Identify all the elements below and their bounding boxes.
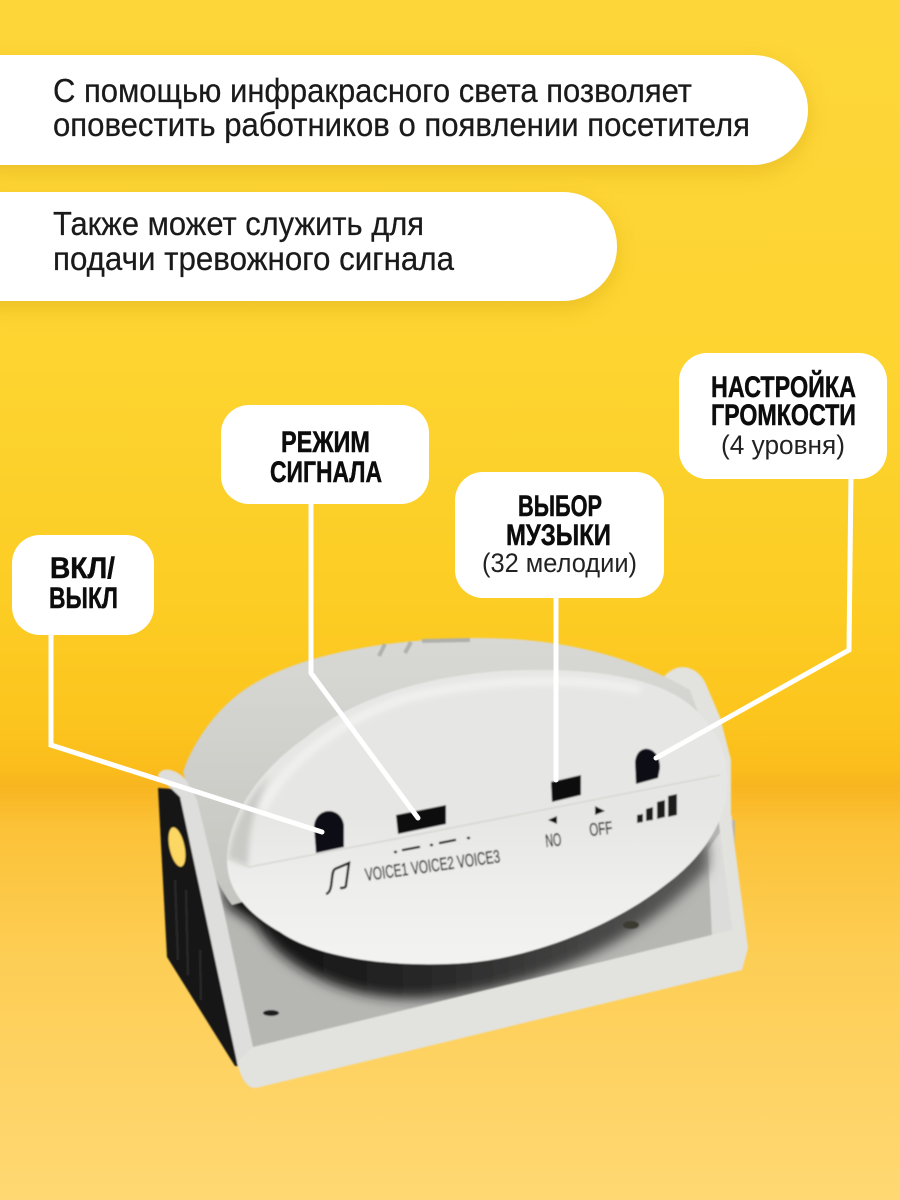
right arrow and OFF label: OFF	[588, 818, 613, 840]
music note icon	[326, 863, 349, 894]
bracket ribs	[175, 880, 201, 1000]
callout: music selection	[455, 472, 664, 598]
left arrow and NO label	[544, 816, 562, 851]
music switch	[551, 775, 581, 802]
black side bracket	[158, 788, 240, 1066]
oval front face	[227, 670, 727, 964]
base front lip	[237, 930, 748, 1088]
mode switch	[396, 805, 446, 834]
right post	[663, 667, 748, 948]
connector line: signal mode	[311, 500, 418, 818]
base floor	[200, 820, 735, 1047]
voice labels: VOICE1 VOICE2 VOICE3	[364, 846, 501, 885]
callout: volume: (4 уровня)	[721, 430, 845, 460]
mounting hole	[166, 826, 188, 868]
vent marks on dome	[379, 640, 470, 656]
right inner wall	[708, 815, 734, 937]
callout: volume: НАСТРОЙКА	[711, 370, 856, 404]
device illustration	[158, 638, 748, 1088]
pill: infrared notification text	[0, 55, 808, 172]
right arrow and OFF label	[588, 806, 613, 840]
callout: music selection: МУЗЫКИ	[506, 519, 611, 552]
pill: alarm signal text: подачи тревожного сигнала	[53, 240, 455, 277]
rear dome shell	[183, 638, 715, 905]
callout: music selection: (32 мелодии)	[482, 548, 637, 578]
power knob slot	[314, 811, 344, 853]
volume level bars	[637, 794, 677, 823]
connector line: volume	[656, 475, 851, 758]
callout: power: ВЫКЛ	[49, 582, 118, 615]
screws	[263, 1010, 279, 1016]
left white arm	[158, 770, 253, 1088]
floor shadow under oval	[226, 840, 708, 998]
pill: alarm signal text	[0, 192, 617, 308]
pill: infrared notification text: оповестить работников о появлении посетителя	[53, 106, 750, 143]
pill: alarm signal text: Также может служить для	[53, 205, 424, 242]
connector line: power	[51, 630, 322, 832]
left arrow and NO label: NO	[544, 829, 562, 851]
callout: signal mode: РЕЖИМ	[281, 426, 370, 459]
volume knob slot	[635, 749, 660, 784]
callout: signal mode	[221, 405, 429, 504]
callout: power	[12, 535, 154, 635]
pill: infrared notification text: С помощью инфракрасного света позволяет	[53, 72, 692, 109]
connector line: music	[554, 595, 558, 780]
callout: signal mode: СИГНАЛА	[270, 456, 382, 489]
left bevel shading	[228, 775, 270, 866]
oval top highlight	[262, 681, 640, 810]
callout: volume	[679, 353, 887, 479]
callout: power: ВКЛ/	[50, 552, 116, 585]
callout: volume: ГРОМКОСТИ	[711, 399, 856, 432]
seam between panels	[228, 775, 720, 867]
voice selector dots	[395, 838, 469, 852]
callout: music selection: ВЫБОР	[518, 490, 602, 523]
